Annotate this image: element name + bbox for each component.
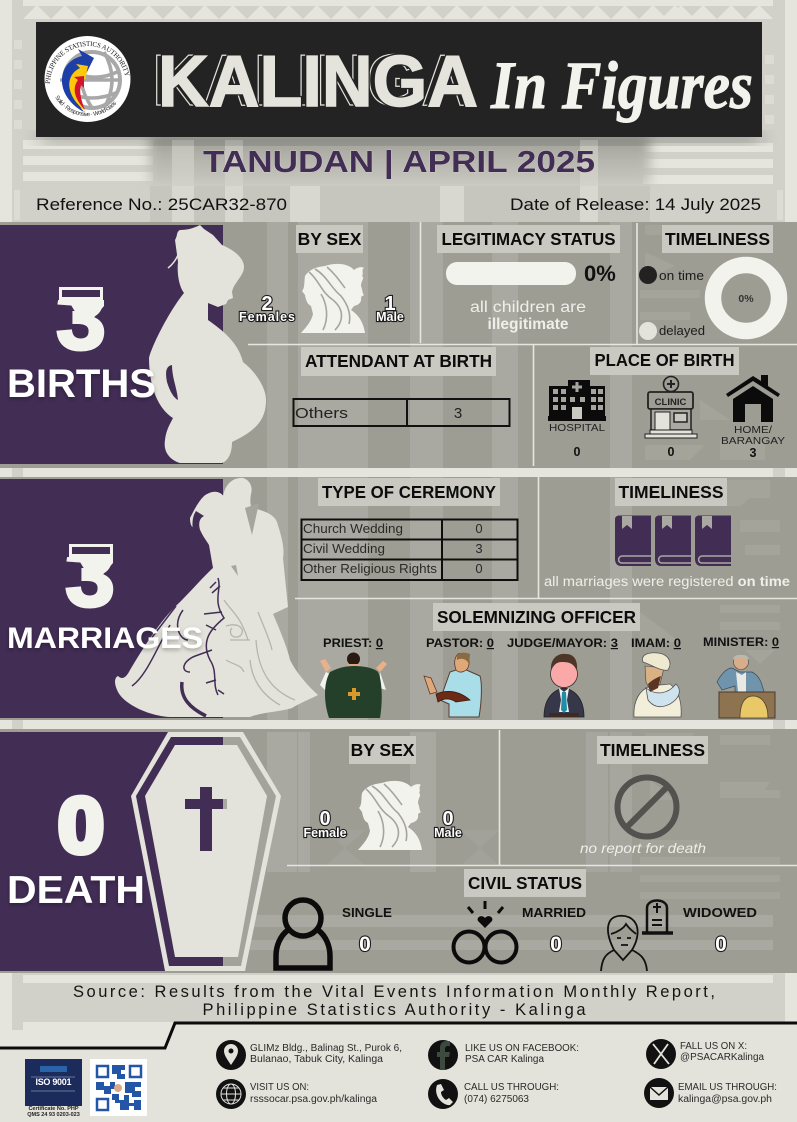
place of birth bbox=[548, 347, 785, 460]
icon: clinic bbox=[645, 376, 697, 438]
priest bbox=[320, 636, 387, 718]
title KALINGA: KALINGA bbox=[158, 42, 478, 122]
minister bbox=[703, 635, 779, 718]
source note: Source: Results from the Vital Events Information Monthly Report, bbox=[73, 983, 715, 1001]
place of birth: 0 bbox=[574, 445, 581, 459]
imam bbox=[631, 636, 681, 717]
release date: Date of Release: 14 July 2025 bbox=[510, 195, 761, 214]
contact: facebook: PSA CAR Kalinga bbox=[465, 1054, 544, 1065]
by sex: BY SEX bbox=[298, 229, 362, 249]
marriages label: MARRIAGES bbox=[7, 622, 203, 655]
contact: address: GLIMz Bldg., Balinag St., Purok 6, bbox=[250, 1043, 402, 1054]
contact: X bbox=[646, 1039, 764, 1069]
timeliness marriages: all marriages were registered on time bbox=[544, 574, 791, 589]
solemnizing officer: SOLEMNIZING OFFICER bbox=[437, 607, 636, 627]
by sex bbox=[239, 225, 404, 333]
judge: JUDGE/MAYOR: 3 bbox=[507, 636, 618, 650]
attendant at birth bbox=[294, 347, 510, 426]
place of birth: 0 bbox=[668, 445, 675, 459]
legitimacy status bbox=[437, 225, 620, 333]
icon: hospital bbox=[548, 380, 606, 421]
civil status: WIDOWED bbox=[683, 905, 757, 920]
deaths number: 0 bbox=[58, 781, 104, 869]
legitimacy status: illegitimate bbox=[488, 316, 569, 333]
judge bbox=[507, 636, 618, 717]
place of birth: BARANGAY bbox=[721, 436, 785, 447]
ISO badge bbox=[25, 1059, 82, 1118]
by sex deaths: Male bbox=[434, 826, 462, 840]
PSA logo bbox=[44, 36, 130, 122]
icon: single bbox=[276, 900, 330, 968]
timeliness deaths bbox=[580, 736, 708, 856]
contact: website bbox=[216, 1079, 377, 1109]
coffin bbox=[131, 732, 281, 971]
timeliness births: 0% bbox=[738, 293, 754, 305]
attendant at birth: 3 bbox=[454, 405, 462, 422]
timeliness deaths: no report for death bbox=[580, 840, 706, 856]
bride and groom silhouette bbox=[115, 478, 318, 717]
timeliness births: on time bbox=[659, 269, 704, 283]
contact: phone: (074) 6275063 bbox=[464, 1094, 529, 1105]
timeliness marriages: TIMELINESS bbox=[618, 482, 724, 502]
PSA logo: PHILIPPINE STATISTICS AUTHORITY bbox=[45, 41, 130, 84]
by sex deaths: Female bbox=[303, 826, 347, 840]
priest: PRIEST: 0 bbox=[323, 636, 383, 650]
panel: deaths bbox=[0, 729, 797, 973]
civil status: MARRIED bbox=[522, 905, 586, 920]
by sex deaths: BY SEX bbox=[351, 740, 415, 760]
pastor bbox=[424, 636, 494, 717]
minister: MINISTER: 0 bbox=[703, 635, 779, 649]
header banner bbox=[36, 22, 762, 137]
title In Figures: In Figures bbox=[490, 47, 753, 123]
legitimacy status: 0% bbox=[584, 261, 616, 286]
by sex: 2 bbox=[261, 293, 273, 315]
timeliness deaths: TIMELINESS bbox=[600, 740, 705, 760]
subtitle: TANUDAN | APRIL 2025 bbox=[203, 144, 595, 179]
by sex deaths bbox=[303, 736, 462, 850]
type of ceremony bbox=[302, 478, 518, 580]
contact: email bbox=[644, 1078, 777, 1108]
contact: X: FALL US ON X: bbox=[680, 1041, 747, 1052]
icon: books bbox=[615, 516, 731, 566]
contact: facebook bbox=[428, 1040, 579, 1070]
type of ceremony: 0 bbox=[475, 521, 483, 536]
type of ceremony: Other Religious Rights bbox=[303, 561, 438, 576]
attendant at birth: ATTENDANT AT BIRTH bbox=[305, 351, 492, 371]
reference number: Reference No.: 25CAR32-870 bbox=[36, 195, 287, 214]
contact: website: rsssocar.psa.gov.ph/kalinga bbox=[250, 1094, 377, 1105]
icon: clinic: CLINIC bbox=[655, 397, 686, 408]
solemnizing officer bbox=[320, 603, 779, 718]
contact: email: kalinga@psa.gov.ph bbox=[678, 1094, 772, 1105]
civil status: SINGLE bbox=[342, 905, 392, 920]
by sex: Females bbox=[239, 310, 295, 324]
contact: address bbox=[216, 1040, 402, 1070]
by sex deaths: 0 bbox=[319, 808, 331, 830]
civil status: 0 bbox=[550, 933, 562, 956]
imam: IMAM: 0 bbox=[631, 636, 681, 650]
births number: 3 bbox=[56, 269, 106, 369]
PSA logo: Solid · Responsive · World-class bbox=[56, 96, 116, 116]
legitimacy status: all children are bbox=[470, 299, 586, 316]
source note: Philippine Statistics Authority - Kalinga bbox=[202, 1001, 586, 1019]
place of birth: HOME/ bbox=[734, 425, 772, 436]
panel: marriages bbox=[0, 477, 797, 720]
source note bbox=[73, 983, 715, 1019]
title KALINGA: KALINGA bbox=[152, 41, 472, 121]
panel: births bbox=[0, 222, 797, 468]
dividers bbox=[295, 477, 797, 598]
icon: married bbox=[454, 901, 516, 962]
contact: email: EMAIL US THROUGH: bbox=[678, 1082, 777, 1093]
icon: widowed bbox=[601, 900, 673, 971]
type of ceremony: 0 bbox=[475, 561, 483, 576]
by sex deaths: 0 bbox=[442, 808, 454, 830]
icon: house bbox=[726, 375, 780, 422]
pregnant woman silhouette bbox=[149, 225, 266, 463]
deaths label: DEATH bbox=[7, 869, 145, 912]
births label: BIRTHS bbox=[7, 362, 156, 406]
timeliness births bbox=[639, 225, 779, 340]
timeliness marriages bbox=[544, 478, 791, 589]
contact: website: VISIT US ON: bbox=[250, 1082, 309, 1093]
QR code bbox=[90, 1059, 147, 1116]
type of ceremony: Church Wedding bbox=[303, 521, 403, 536]
icon: prohibited bbox=[618, 778, 676, 836]
civil status: 0 bbox=[359, 933, 371, 956]
timeliness births: delayed bbox=[659, 324, 705, 338]
by sex: 1 bbox=[384, 293, 396, 315]
footer bbox=[0, 1023, 797, 1122]
pastor: PASTOR: 0 bbox=[426, 636, 494, 650]
contact: phone: CALL US THROUGH: bbox=[464, 1082, 559, 1093]
dividers bbox=[248, 222, 797, 466]
dividers bbox=[287, 730, 797, 866]
civil status: CIVIL STATUS bbox=[468, 873, 582, 893]
type of ceremony: 3 bbox=[475, 541, 483, 556]
civil status bbox=[276, 869, 757, 971]
contact: phone bbox=[428, 1079, 559, 1109]
legitimacy status: LEGITIMACY STATUS bbox=[442, 229, 616, 249]
place of birth: 3 bbox=[750, 446, 757, 460]
contact: facebook: LIKE US ON FACEBOOK: bbox=[465, 1043, 579, 1054]
timeliness births: TIMELINESS bbox=[665, 229, 770, 249]
contact: X: @PSACARKalinga bbox=[680, 1052, 764, 1063]
attendant at birth: Others bbox=[295, 405, 348, 422]
place of birth: HOSPITAL bbox=[549, 423, 606, 434]
by sex: Male bbox=[376, 310, 404, 324]
marriages number: 3 bbox=[65, 526, 115, 626]
civil status: 0 bbox=[715, 933, 727, 956]
title KALINGA: KALINGA bbox=[158, 42, 478, 122]
ISO badge: Certificate No. PHP bbox=[28, 1106, 79, 1112]
type of ceremony: TYPE OF CEREMONY bbox=[322, 482, 496, 502]
place of birth: PLACE OF BIRTH bbox=[594, 350, 734, 370]
contact: address: Bulanao, Tabuk City, Kalinga bbox=[250, 1054, 383, 1065]
ISO badge: ISO 9001 bbox=[36, 1077, 72, 1087]
type of ceremony: Civil Wedding bbox=[303, 541, 385, 556]
ISO badge: QMS 24 93 0203-023 bbox=[27, 1112, 80, 1118]
